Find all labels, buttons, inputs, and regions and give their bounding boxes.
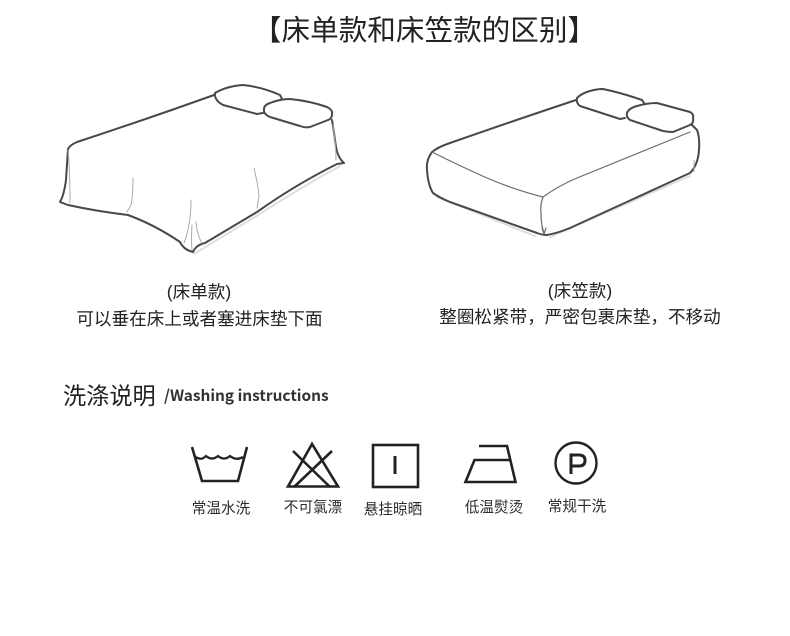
caption: fitted sheet: (床笠款) bbox=[548, 281, 612, 301]
caption: flat sheet bbox=[76, 282, 323, 329]
illustration: fitted sheet bed bbox=[427, 89, 699, 237]
label: no bleach: 不可氯漂 bbox=[284, 499, 343, 516]
illustration: flat sheet bed bbox=[60, 85, 344, 254]
caption: fitted sheet: 整圈松紧带，严密包裹床垫，不移动 bbox=[439, 307, 721, 327]
label: iron: 低温熨烫 bbox=[465, 499, 524, 516]
caption: flat sheet: 可以垂在床上或者塞进床垫下面 bbox=[76, 309, 323, 329]
label: wash: 常温水洗 bbox=[192, 500, 251, 517]
label: hang dry: 悬挂晾晒 bbox=[364, 501, 422, 518]
caption: fitted sheet bbox=[439, 281, 721, 327]
icon: dry clean P bbox=[556, 442, 596, 484]
heading: washing instructions: 洗涤说明 bbox=[63, 383, 156, 409]
heading: washing instructions: /Washing instructions bbox=[164, 384, 329, 406]
heading: washing instructions bbox=[63, 383, 329, 409]
title: 【床单款和床笠款的区别】 bbox=[253, 15, 596, 47]
icon: low temp iron bbox=[466, 446, 516, 482]
icon: no bleach bbox=[288, 444, 338, 487]
label: dry clean: 常规干洗 bbox=[548, 498, 607, 515]
caption: flat sheet: (床单款) bbox=[167, 282, 231, 302]
icon: hang dry bbox=[373, 445, 418, 487]
icon: wash basin bbox=[192, 447, 247, 481]
